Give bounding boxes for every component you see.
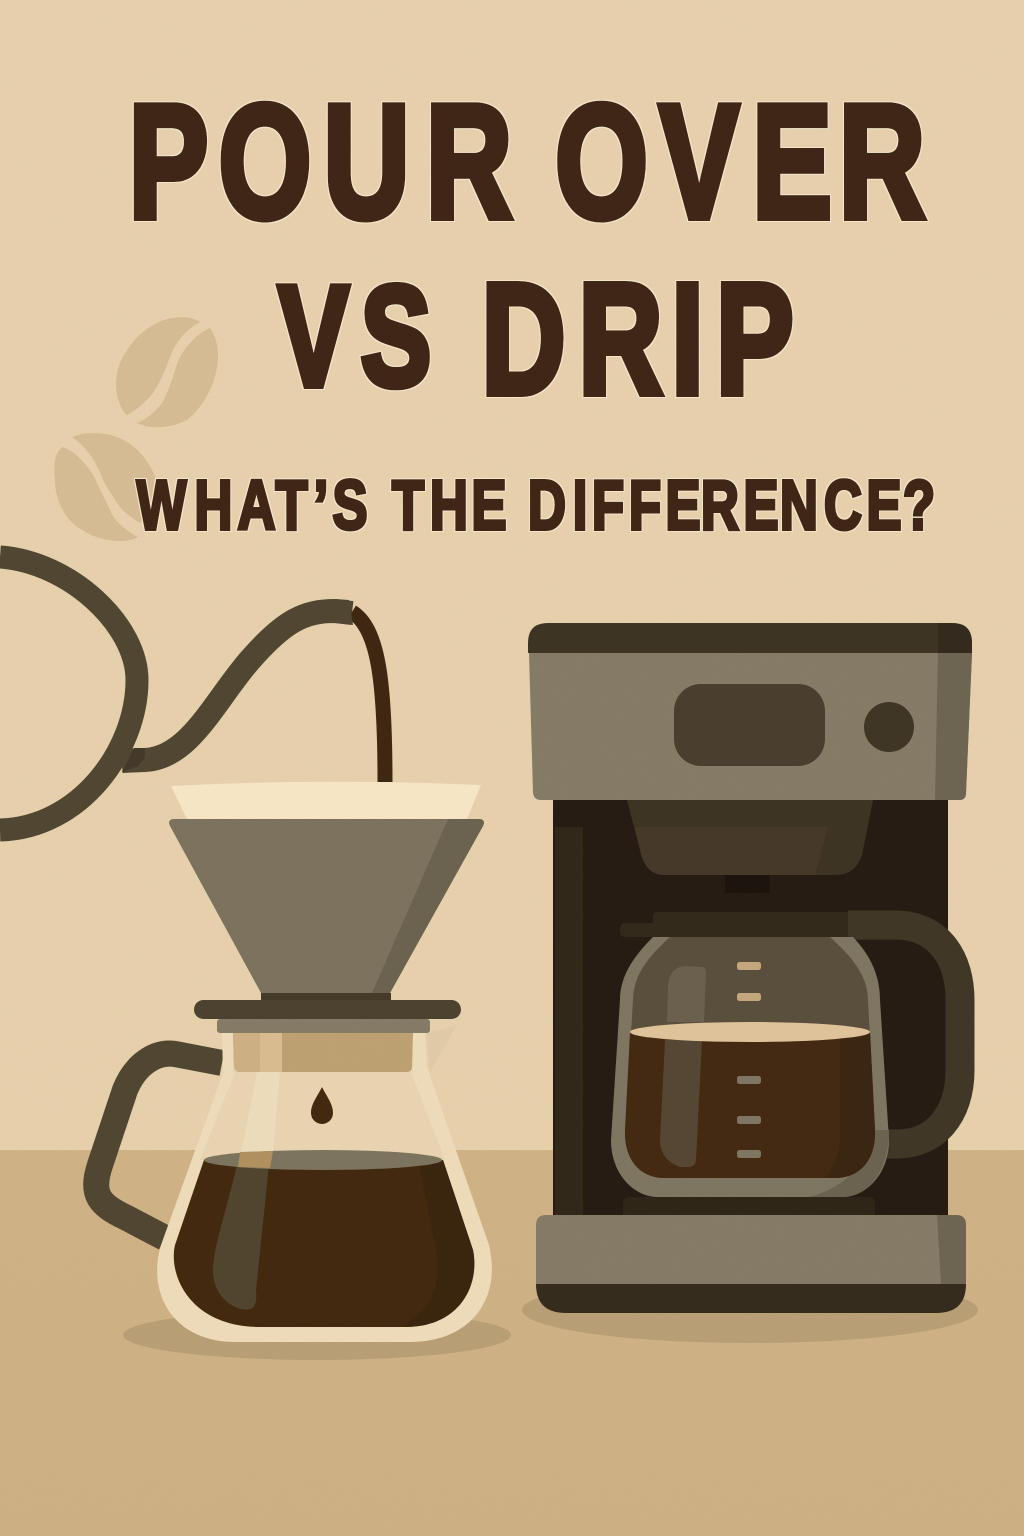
carafe inner glass (625, 937, 875, 1178)
knob (864, 702, 914, 752)
bean: lower (54, 433, 157, 541)
shadow under carafe (123, 1310, 511, 1360)
title line 2: VS (279, 258, 458, 416)
gooseneck kettle (0, 557, 352, 830)
drip coffee machine (528, 623, 972, 1313)
shadow under drip machine (522, 1277, 978, 1343)
title line 1: POUR OVER (129, 73, 925, 252)
title (129, 73, 935, 545)
coffee pour stream (352, 612, 385, 782)
coffee in carafe (174, 1160, 474, 1327)
coffee drop (311, 1087, 333, 1124)
coffee shade (825, 1033, 875, 1178)
paper filter (171, 782, 481, 819)
coffee surface (630, 1022, 870, 1042)
coffee surface (204, 1150, 442, 1170)
drip carafe (611, 912, 960, 1197)
coffee dark side (406, 1160, 474, 1327)
carafe lid (620, 912, 848, 937)
control panel shade (935, 653, 972, 800)
inner neck light part (233, 1033, 281, 1072)
dripper disc (194, 1000, 461, 1019)
decorative coffee beans (54, 317, 218, 541)
machine body (553, 795, 948, 1220)
glare on coffee (213, 1165, 269, 1310)
dripper shaded side (372, 819, 484, 993)
glass carafe (96, 1026, 492, 1342)
machine base (536, 1215, 966, 1313)
pour over dripper (169, 819, 484, 1019)
brew basket (627, 800, 873, 875)
highlight on neck (260, 1033, 282, 1072)
highlight below neck (241, 1072, 280, 1152)
body left strip (555, 827, 583, 1217)
carafe handle (96, 1054, 222, 1238)
lower highlight (660, 1040, 702, 1167)
drip carafe handle (848, 925, 960, 1144)
carafe outer ring (611, 937, 889, 1197)
base foot (536, 1284, 966, 1313)
base shade (937, 1215, 966, 1284)
display (674, 684, 825, 766)
basket front (635, 827, 828, 875)
bean: upper (116, 317, 218, 427)
subtitle: WHAT’S THE DIFFERENCE? (137, 467, 935, 545)
neck shadow (427, 1026, 456, 1072)
carafe ring shade (808, 1130, 889, 1197)
spout joint (122, 748, 145, 772)
inner neck tube (233, 1033, 413, 1072)
spout tip (335, 599, 353, 625)
dripper collar (261, 993, 391, 1002)
carafe hot plate (623, 1197, 875, 1219)
base front (536, 1215, 966, 1284)
dripper cone (169, 819, 484, 993)
surface highlight (238, 1151, 273, 1168)
control panel (529, 653, 972, 800)
measuring ticks (737, 962, 761, 1158)
carafe neck ring (217, 1019, 430, 1033)
background wall (0, 0, 1024, 1150)
table surface (0, 1150, 1024, 1536)
upper highlight (667, 966, 706, 1022)
drip nozzle (725, 875, 770, 893)
drip coffee (620, 1032, 880, 1182)
kettle handle ring (0, 557, 137, 830)
glass interior (200, 1050, 445, 1160)
top cap (528, 623, 972, 653)
kettle spout (122, 611, 352, 761)
carafe glass body (157, 1033, 492, 1342)
top cap shade (938, 623, 972, 653)
title line 2: DRIP (482, 252, 794, 427)
